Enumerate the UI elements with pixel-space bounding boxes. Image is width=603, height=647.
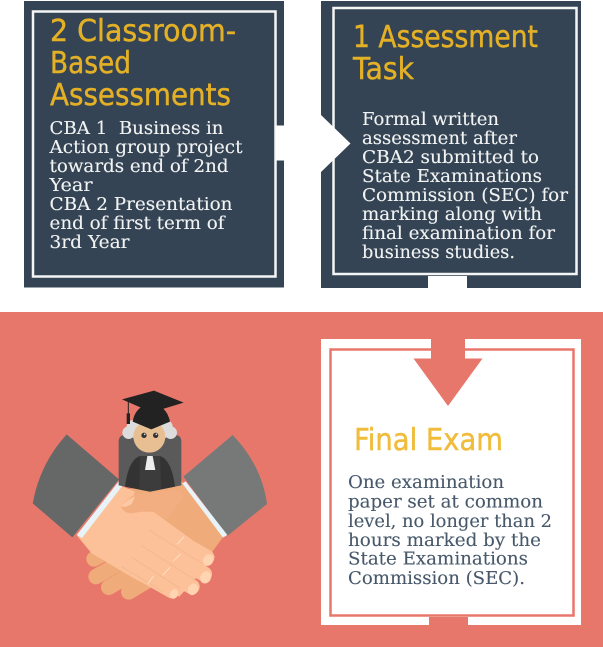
- text: assessment task description: assessment after: [362, 129, 518, 149]
- heading: 2 Classroom-Based Assessments: [50, 14, 236, 113]
- text: final exam description: One examination: [348, 473, 504, 493]
- illustration: handshake with judge figure: [33, 391, 267, 600]
- panel: final exam band: [0, 312, 603, 647]
- heading: 2 Classroom-Based Assessments: 2 Classroom-: [50, 14, 236, 49]
- arrow: down into final exam card: [414, 339, 482, 406]
- heading: 2 Classroom-Based Assessments: Based: [50, 46, 131, 81]
- text: assessment task description: Formal written: [362, 110, 499, 130]
- left cuff: [77, 481, 123, 538]
- text: final exam description: paper set at common: [348, 492, 543, 512]
- notch: bottom of assessment task panel: [428, 276, 467, 288]
- right sleeve: [183, 435, 267, 536]
- judge figure: [119, 391, 184, 492]
- front hand: [77, 486, 216, 600]
- text: CBA descriptions: towards end of 2nd: [50, 157, 228, 177]
- text: final exam description: [348, 473, 552, 589]
- text: CBA descriptions: Action group project: [48, 138, 243, 158]
- text: final exam description: hours marked by the: [348, 531, 541, 551]
- text: assessment task description: State Examinations: [362, 167, 542, 187]
- text: CBA descriptions: [48, 119, 242, 253]
- notch: bottom of final exam card: [429, 617, 468, 625]
- text: CBA descriptions: end of first term of: [50, 214, 226, 234]
- text: assessment task description: marking along with: [362, 205, 542, 225]
- text: final exam description: level, no longer than 2: [348, 512, 552, 532]
- text: assessment task description: final examination for: [362, 224, 556, 244]
- text: CBA descriptions: CBA 2 Presentation: [50, 195, 232, 215]
- right cuff: [182, 481, 227, 538]
- text: assessment task description: Commission (SEC) for: [362, 186, 569, 206]
- arrow: right from classroom assessments to assessment task: [276, 115, 350, 172]
- panel: final exam card: [321, 339, 581, 625]
- heading: 1 Assessment Task: 1 Assessment: [353, 20, 538, 55]
- left sleeve: [33, 434, 119, 537]
- heading: 1 Assessment Task: [352, 20, 538, 87]
- text: assessment task description: CBA2 submitted to: [362, 148, 539, 168]
- heading: Final Exam: Final Exam: [354, 423, 503, 458]
- heading: 2 Classroom-Based Assessments: Assessments: [50, 78, 231, 113]
- heading: 1 Assessment Task: Task: [352, 52, 415, 87]
- text: assessment task description: business studies.: [362, 243, 515, 263]
- text: assessment task description: [362, 110, 569, 263]
- text: CBA descriptions: Year: [48, 176, 93, 196]
- back hand: [94, 482, 223, 592]
- text: final exam description: State Examinations: [348, 550, 528, 570]
- panel: classroom-based assessments: [24, 1, 284, 288]
- text: CBA descriptions: CBA 1 Business in: [50, 119, 223, 139]
- text: CBA descriptions: 3rd Year: [50, 233, 130, 253]
- text: final exam description: Commission (SEC).: [348, 569, 525, 589]
- panel: assessment task: [321, 1, 581, 288]
